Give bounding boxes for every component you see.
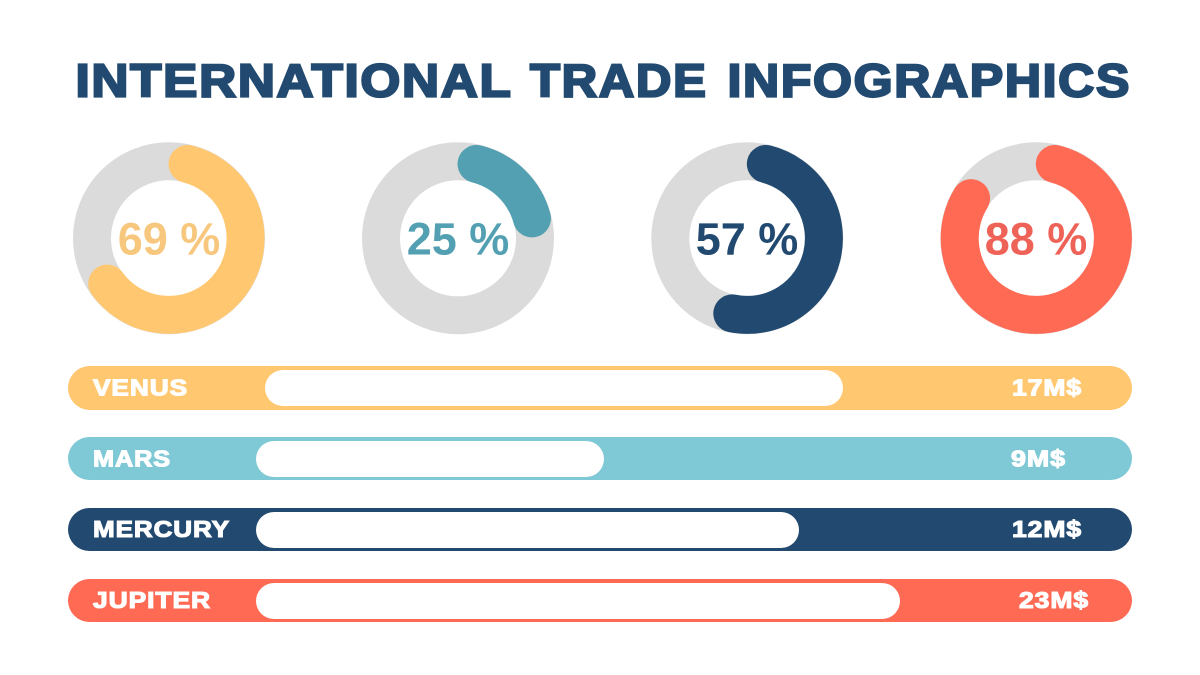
bar: Venus: 17M$ (1012, 374, 1082, 400)
donut chart: 57% (654, 145, 840, 331)
bar: Mars (68, 437, 1132, 480)
donut chart: 57%: 57 % (696, 214, 798, 264)
title (76, 54, 1131, 106)
bar: Jupiter (68, 579, 1132, 622)
bar: Mercury (68, 508, 1132, 551)
donut chart: 88%: 88 % (985, 214, 1087, 264)
bar: Mars: MARS (93, 446, 171, 472)
donut chart: 88% (943, 145, 1129, 331)
bar: Mars: 9M$ (1011, 446, 1066, 472)
title: INTERNATIONAL (76, 54, 512, 106)
bar: Venus: VENUS (93, 374, 188, 400)
donut chart: 25% (365, 145, 551, 331)
bar: Mercury: 12M$ (1012, 516, 1082, 542)
title: INFOGRAPHICS (728, 54, 1131, 106)
bar: Venus (68, 366, 1132, 410)
bar: Mercury: MERCURY (93, 516, 230, 542)
donut chart: 69%: 69 % (118, 214, 220, 264)
title: TRADE (530, 54, 708, 106)
donut chart: 69% (76, 145, 262, 331)
bar: Jupiter: 23M$ (1019, 587, 1089, 613)
donut chart: 25%: 25 % (407, 214, 509, 264)
bar: Jupiter: JUPITER (93, 587, 211, 613)
